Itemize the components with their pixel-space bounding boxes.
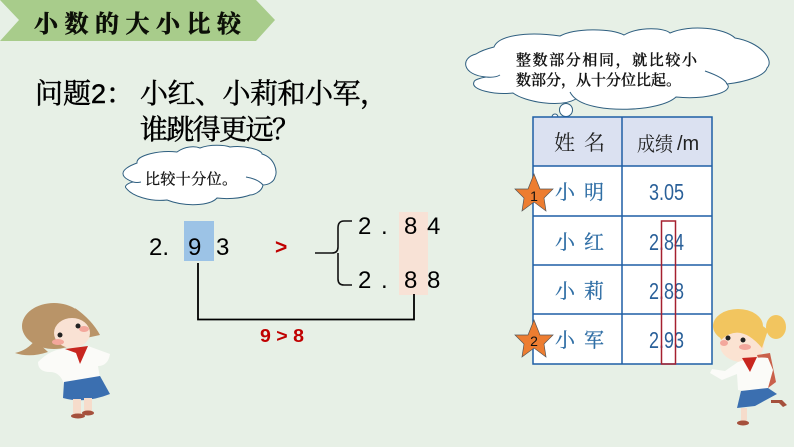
illustration: girl right bbox=[710, 309, 787, 426]
comparison: 2.93 bbox=[149, 221, 229, 261]
thought cloud: rule: 数部分，从十分位比起。 bbox=[516, 69, 681, 90]
score table: 小 bbox=[555, 275, 576, 304]
comparison: 2.84 and 2.88: 8 bbox=[427, 267, 440, 294]
score table: 小 bbox=[555, 226, 576, 255]
star 2 bbox=[515, 320, 553, 357]
callout: compare tenths bbox=[123, 145, 276, 205]
score table: 2.93 bbox=[649, 327, 684, 353]
title banner: 小数的大小比较 bbox=[34, 4, 243, 39]
comparison: 2.84 and 2.88: 2 bbox=[358, 267, 371, 294]
question heading: 问题2： bbox=[35, 72, 134, 112]
comparison: 2.93: 9 bbox=[188, 234, 201, 261]
score table: 2.88 bbox=[649, 278, 684, 304]
score table: 明 bbox=[584, 176, 604, 205]
comparison: 2.93: 2. bbox=[149, 234, 169, 261]
comparison: 2.84 and 2.88: . bbox=[381, 267, 388, 294]
score table: 3.05 bbox=[649, 179, 684, 205]
score table: 红 bbox=[584, 226, 604, 255]
label: 9 > 8: 9 > 8 bbox=[260, 326, 304, 346]
table header fill bbox=[533, 117, 712, 166]
score table: 小 bbox=[555, 324, 576, 353]
score table: /m bbox=[677, 133, 699, 155]
question heading: 谁跳得更远？ bbox=[140, 108, 300, 148]
score table: 成绩 bbox=[637, 128, 673, 157]
connector line bbox=[198, 263, 414, 320]
callout: compare tenths: 比较十分位。 bbox=[145, 168, 237, 189]
comparison: 2.84 and 2.88: 8 bbox=[404, 267, 417, 294]
star 2: 2 bbox=[530, 333, 538, 349]
brace bbox=[315, 221, 352, 285]
illustration: girl left bbox=[15, 303, 110, 418]
tenths highlight blue bbox=[184, 221, 214, 261]
comparison: 2.84 and 2.88 bbox=[358, 212, 440, 295]
greater-than sign: > bbox=[275, 236, 287, 259]
star 1 bbox=[515, 174, 553, 211]
comparison: 2.84 and 2.88: 2 bbox=[358, 213, 371, 240]
score table: 军 bbox=[584, 324, 604, 353]
comparison: 2.84 and 2.88: . bbox=[381, 213, 388, 240]
question heading bbox=[35, 72, 388, 148]
star 1: 1 bbox=[530, 188, 538, 204]
thought cloud: rule: 整数部分相同，就比较小 bbox=[516, 49, 698, 70]
comparison: 2.84 and 2.88: 8 bbox=[404, 213, 417, 240]
score table: 名 bbox=[584, 127, 605, 157]
score table: 小 bbox=[555, 176, 576, 205]
comparison: 2.93: 3 bbox=[216, 234, 229, 261]
score table bbox=[533, 117, 712, 364]
score table: 莉 bbox=[584, 275, 604, 304]
title banner bbox=[0, 0, 275, 41]
question heading: 小红、小莉和小军， bbox=[140, 72, 388, 112]
score table: 2.84 bbox=[649, 229, 684, 255]
tenths highlight peach bbox=[399, 212, 428, 295]
red highlight on tenths column bbox=[662, 221, 676, 364]
comparison: 2.84 and 2.88: 4 bbox=[427, 213, 440, 240]
score table: 姓 bbox=[554, 127, 575, 157]
thought cloud: rule bbox=[466, 28, 769, 120]
